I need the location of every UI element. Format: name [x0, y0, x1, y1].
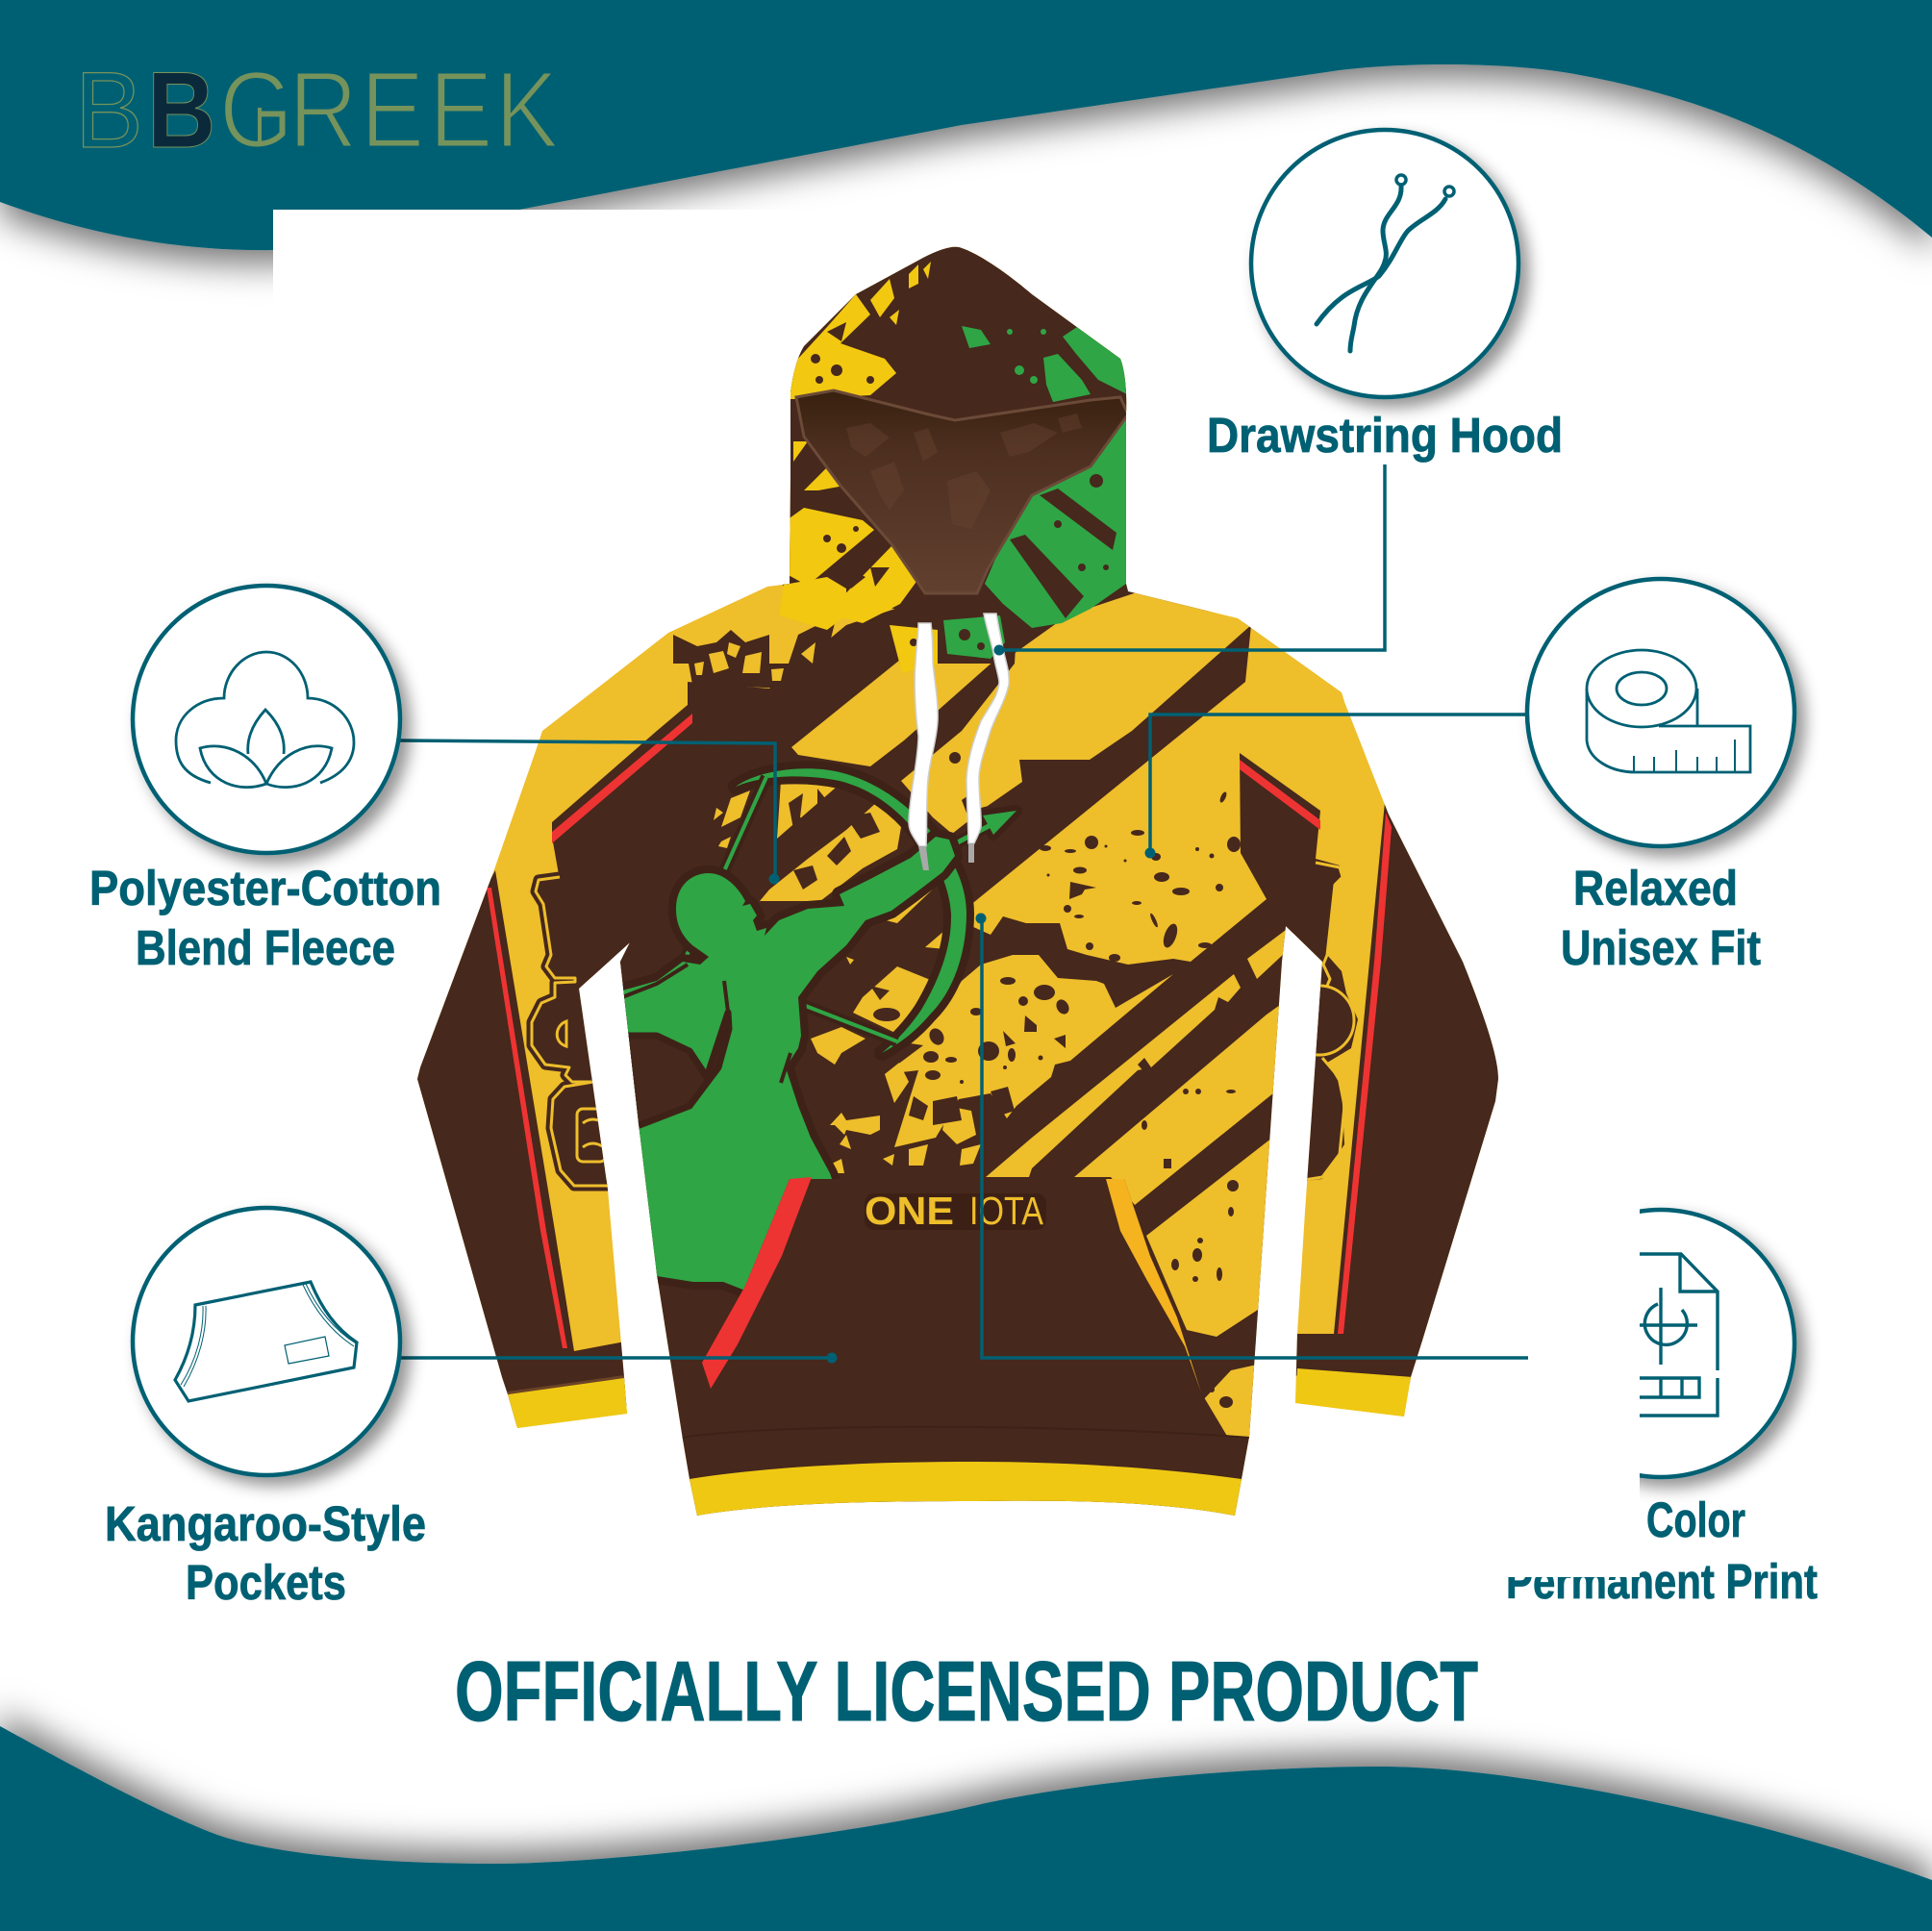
yellow band: upper right [901, 577, 1251, 834]
hood inner lining [796, 390, 1128, 593]
pocket yellow trim [1106, 1179, 1201, 1392]
label: drawstring hood: Drawstring Hood [1207, 408, 1563, 463]
label: relaxed unisex fit [1561, 861, 1761, 975]
pocket logo: ONE [865, 1189, 954, 1233]
hood [779, 246, 1135, 664]
product photo white background [273, 210, 1640, 1577]
label: kangaroo-style pockets: Kangaroo-Style [105, 1496, 426, 1551]
icon: cotton boll [176, 652, 354, 788]
collar patches [890, 625, 938, 673]
circle: drawstring hood [1251, 130, 1518, 397]
connector: drawstring hood [994, 464, 1385, 656]
hem ribbing seam [681, 1427, 1250, 1438]
logo: BB GREEK: B [147, 51, 215, 170]
circle: kangaroo pockets [133, 1208, 400, 1475]
archer figure [604, 768, 1016, 1291]
figure hip shape [615, 1013, 729, 1130]
figure detail lines [622, 965, 790, 1083]
right sleeve brown [1296, 804, 1498, 1384]
label: kangaroo-style pockets [105, 1496, 426, 1610]
pouch pocket [683, 1179, 1231, 1442]
yellow band: lower right [1074, 1006, 1279, 1205]
shoulder splatter [673, 624, 835, 689]
pocket red trim [702, 1177, 812, 1389]
drawstrings [909, 614, 1009, 870]
archer silhouette [604, 837, 955, 1291]
hood yellow patches [779, 262, 931, 630]
label: full-color permanent print: Full- [1566, 1492, 1635, 1547]
right drawstring [966, 614, 1009, 843]
title: OFFICIALLY LICENSED PRODUCT [455, 1643, 1478, 1739]
pocket logo: IOTA [969, 1189, 1044, 1233]
connector: relaxed fit [1144, 715, 1527, 858]
connector: polyester-cotton [400, 740, 779, 885]
yellow patches: upper left chest [714, 660, 995, 1173]
yellow band: thin [986, 974, 1241, 1177]
hood green stripes [1010, 474, 1117, 618]
right cuff [1295, 1368, 1413, 1421]
label: relaxed unisex fit: Unisex Fit [1561, 920, 1761, 975]
sleeve panel left [532, 865, 635, 1186]
left drawstring tip [918, 846, 929, 870]
torso brown [552, 587, 1293, 1519]
label: full-color permanent print [1506, 1492, 1818, 1609]
icon: measuring tape [1587, 650, 1750, 772]
label: polyester-cotton blend fleece: Blend Fleece [136, 920, 395, 975]
bow [736, 768, 966, 1053]
hood green patches [962, 326, 1127, 628]
hood outer brown [783, 246, 1135, 664]
top wave band [0, 0, 1932, 250]
left sleeve brown [417, 870, 627, 1426]
left drawstring [909, 623, 938, 846]
label: relaxed unisex fit: Relaxed [1573, 861, 1738, 915]
label: kangaroo-style pockets: Pockets [186, 1555, 346, 1610]
bottom wave band [0, 1726, 1932, 1931]
connector: pockets [400, 1352, 837, 1364]
sleeve panel glyphs left [557, 1021, 606, 1162]
shoulder right red stripe [1240, 760, 1320, 830]
circle: full color permanent print [1527, 1210, 1794, 1477]
hem yellow [690, 1462, 1242, 1519]
brown specks [789, 752, 1241, 1408]
arrow [954, 825, 991, 844]
label: polyester-cotton blend fleece [89, 861, 441, 975]
label: full-color permanent print: Permanent Print [1506, 1554, 1818, 1609]
icon: laces [1317, 175, 1454, 351]
bow strings [685, 777, 897, 1041]
label: polyester-cotton blend fleece: Polyester-Cotton [89, 861, 441, 915]
connector: print [975, 914, 1528, 1358]
hood yellow speck shadows [811, 322, 890, 589]
right drawstring tip [968, 843, 974, 863]
pocket logo [865, 1189, 1046, 1233]
sleeve panel right [1240, 753, 1358, 1183]
right sleeve red stripe [1338, 813, 1392, 1334]
label: full-color permanent print: Color [1646, 1492, 1745, 1547]
hoodie base colour [385, 231, 1539, 1539]
logo: BB GREEK: GREEK [219, 49, 559, 170]
left cuff [508, 1377, 630, 1433]
circle: relaxed fit [1527, 579, 1794, 846]
circle: polyester-cotton blend [133, 586, 400, 853]
chest red stripe [552, 714, 692, 843]
hood inner mottling [846, 414, 1082, 498]
yellow band: main chest [969, 625, 1366, 965]
icon: pocket [175, 1282, 357, 1401]
logo: BB GREEK: B [75, 51, 143, 171]
left sleeve red stripe [487, 888, 567, 1348]
hoodie [385, 231, 1539, 1539]
icon: print file [1606, 1254, 1718, 1416]
yellow band: lower chest [885, 955, 1173, 1147]
